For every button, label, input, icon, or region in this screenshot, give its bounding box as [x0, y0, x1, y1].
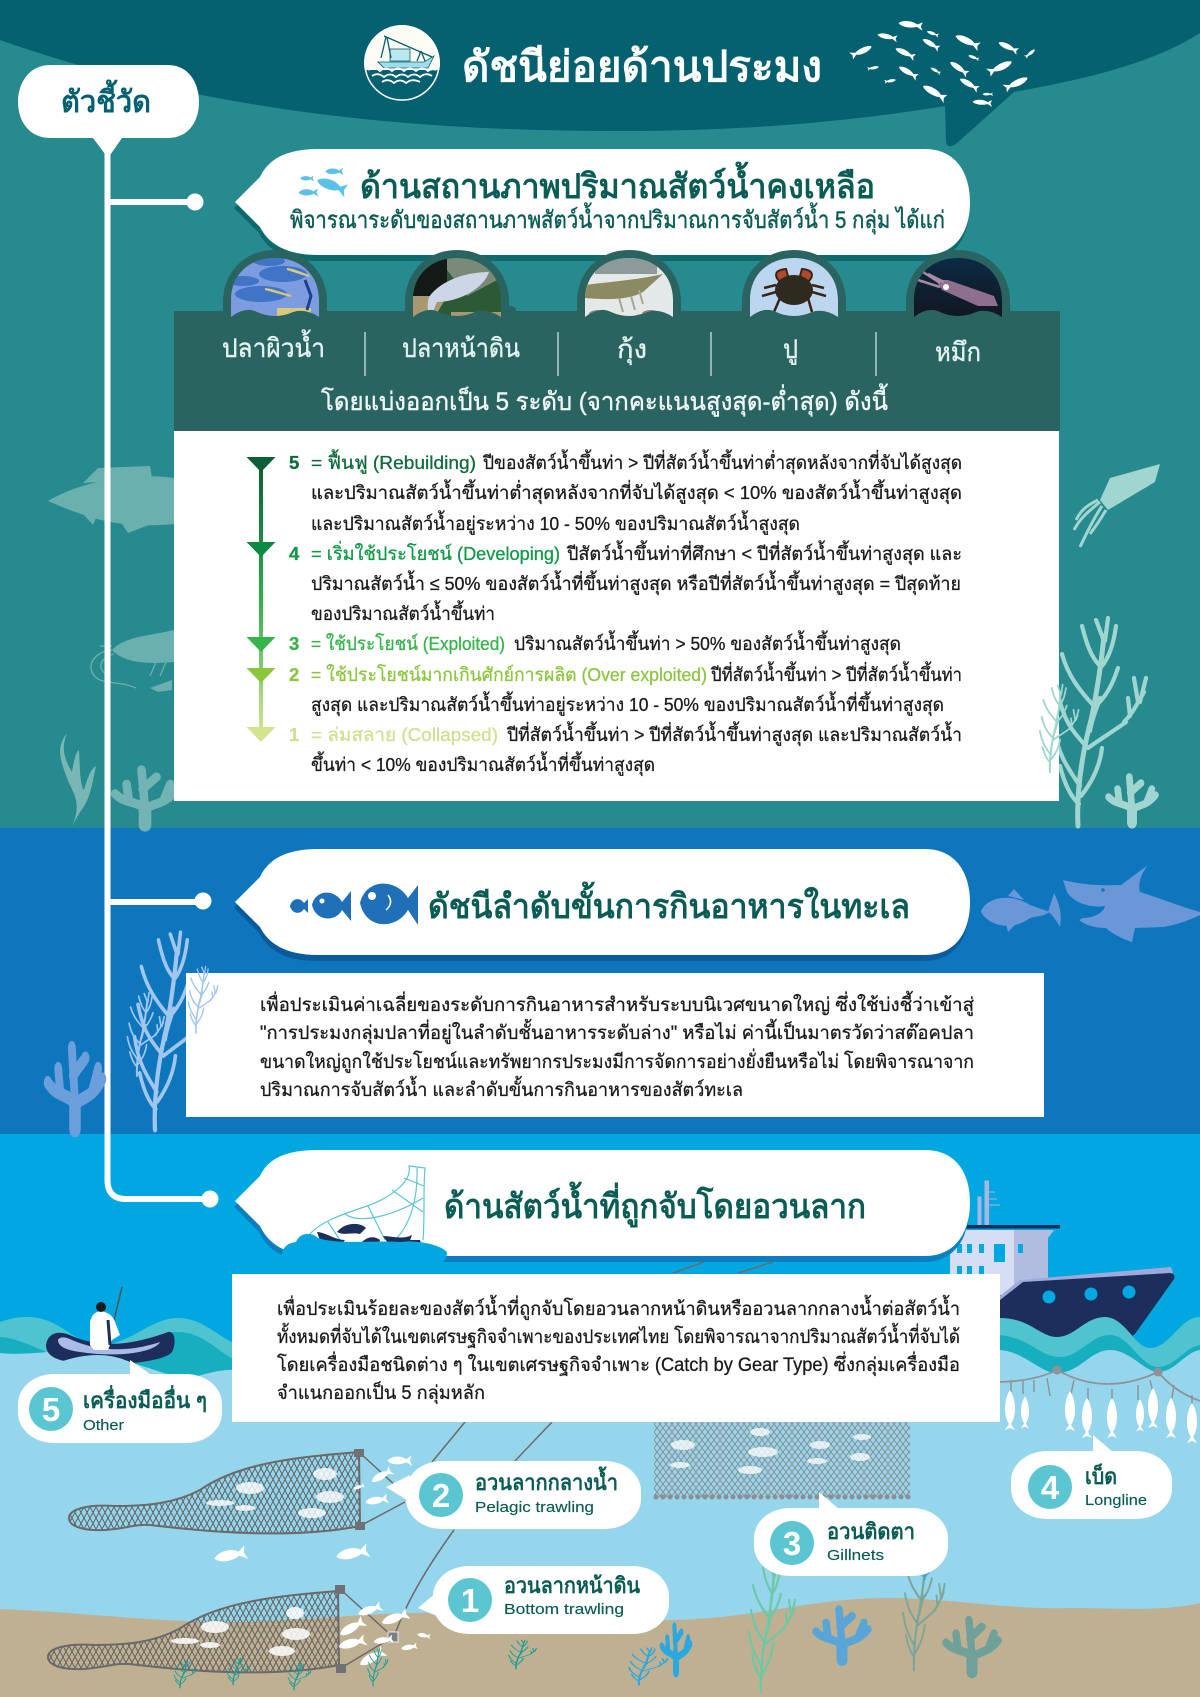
icon: fish trio: [290, 884, 418, 925]
level list: และปริมาณสัตว์น้ำอยู่ระหว่าง 10 - 50% ของปริมาณสัตว์น้ำสูงสุด: [311, 510, 800, 536]
school of fish: [849, 19, 1036, 107]
level list: = ใช้ประโยชน์ (Exploited): [311, 633, 505, 654]
callout 5: other: [18, 1360, 222, 1443]
boat with fisher: [46, 1287, 175, 1375]
decoration: seaweed over trophic panel: [188, 966, 218, 1033]
decoration: grouper fish: [48, 466, 175, 533]
level list: [289, 449, 962, 777]
level list: = ฟื้นฟู (Rebuilding): [311, 449, 476, 474]
level list: ปีสัตว์น้ำขึ้นท่าที่ศึกษา < ปีที่สัตว์น้ำขึ้นท่าสูงสุด และ: [566, 540, 962, 566]
bubble 1 heading: ด้านสถานภาพปริมาณสัตว์น้ำคงเหลือ: [360, 161, 875, 206]
panel: levels: [174, 431, 1059, 801]
callout 2: pelagic trawling: อวนลากกลางน้ำ: [475, 1466, 618, 1495]
seabed: [0, 1598, 1200, 1697]
header banner: [0, 0, 1200, 146]
label bubble: indicators: ตัวชี้วัด: [61, 79, 151, 119]
callout 3: gillnets: อวนติดตา: [827, 1519, 915, 1544]
timeline knob 2: [194, 892, 212, 910]
level list: ของปริมาณสัตว์น้ำขึ้นท่า: [311, 600, 495, 624]
net 1: bottom trawl: [48, 1585, 431, 1673]
seabed plants: [174, 1549, 998, 1692]
panel: bycatch description: โดยเครื่องมือชนิดต่าง ๆ ในเขตเศรษฐกิจจำเพาะ (Catch by Gear Type) ซึ่งกลุ่มเครื่องมือ: [277, 1351, 960, 1377]
arch: squid: [906, 250, 1010, 320]
decoration: seaweed blue large: [135, 932, 213, 1130]
decoration: shark: [1063, 865, 1200, 942]
decoration: coral blue: [48, 1048, 102, 1128]
timeline line: [108, 150, 205, 1199]
timeline knob 1: [186, 194, 204, 210]
level list: ปีที่สัตว์น้ำขึ้นท่า > ปีที่สัตว์น้ำขึ้นท่าสูงสุด และปริมาณสัตว์น้ำ: [506, 721, 962, 747]
species labels: ปลาหน้าดิน: [402, 333, 520, 363]
bubble 2 heading: ดัชนีลำดับขั้นการกินอาหารในทะเล: [428, 881, 910, 926]
bubble 2: [235, 849, 970, 955]
callout 3: gillnets: Gillnets: [827, 1547, 884, 1564]
label bubble: indicators: [18, 65, 199, 158]
decoration: tuna: [981, 889, 1061, 932]
bubble 1 subheading: พิจารณาระดับของสถานภาพสัตว์น้ำจากปริมาณการจับสัตว์น้ำ 5 กลุ่ม ได้แก่: [290, 202, 945, 235]
callout 2: pelagic trawling: [386, 1461, 641, 1529]
timeline knob 3: [202, 1190, 218, 1208]
species labels: ปู: [783, 334, 798, 365]
background: light blue sea section: [0, 1134, 1200, 1697]
level list: 4: [289, 543, 300, 564]
level list: 1: [289, 724, 299, 745]
bubble 3: [235, 1150, 970, 1262]
longline: [1000, 1366, 1200, 1443]
decoration: shrimp: [91, 630, 174, 692]
arch: shrimp: [577, 250, 681, 320]
waves: [0, 1317, 1200, 1697]
species labels: [222, 329, 981, 367]
callout 2: pelagic trawling: 2: [432, 1477, 450, 1514]
arch: crab: [742, 250, 846, 320]
bubble 1 shadow: [234, 155, 969, 261]
level list: และปริมาณสัตว์น้ำขึ้นท่าต่ำสุดหลังจากที่จับได้สูงสุด < 10% ของสัตว์น้ำขึ้นท่าสูงสุด: [311, 479, 962, 505]
decoration: coral right: [1109, 777, 1155, 823]
level list: 5: [289, 452, 299, 473]
panel: trophic description: ขนาดใหญ่ถูกใช้ประโยชน์และทรัพยากรประมงมีการจัดการอย่างยั่งยืนหรือไม่ โดยพิจารณาจาก: [260, 1048, 974, 1073]
panel: trophic description: เพื่อประเมินค่าเฉลี่ยของระดับการกินอาหารสำหรับระบบนิเวศขนาดใหญ่ ซึ่งใช้บ่งชี้ว่าเข้าสู่: [260, 991, 974, 1016]
level list: ปริมาณสัตว์น้ำ ≤ 50% ของสัตว์น้ำที่ขึ้นท่าสูงสุด หรือปีที่สัตว์น้ำขึ้นท่าสูงสุด = ปีสุดท้าย: [311, 570, 961, 596]
background: teal section: [0, 0, 1200, 828]
callout 5: other: 5: [42, 1391, 60, 1428]
level list: ขึ้นท่า < 10% ของปริมาณสัตว์น้ำที่ขึ้นท่าสูงสุด: [311, 751, 655, 777]
arches: [223, 250, 1010, 320]
callout 3: gillnets: 3: [783, 1525, 801, 1562]
decoration: coral left: [115, 770, 175, 825]
callout 4: longline: เบ็ด: [1085, 1462, 1117, 1489]
callout 1: bottom trawling: Bottom trawling: [504, 1601, 624, 1618]
species labels: ปลาผิวน้ำ: [222, 329, 325, 363]
level list: ปริมาณสัตว์น้ำขึ้นท่า > 50% ของสัตว์น้ำขึ้นท่าสูงสุด: [514, 630, 901, 656]
level list: ปีของสัตว์น้ำขึ้นท่า > ปีที่สัตว์น้ำขึ้นท่าต่ำสุดหลังจากที่จับได้สูงสุด: [482, 449, 962, 475]
ship: [950, 1181, 1174, 1345]
level list: สูงสุด และปริมาณสัตว์น้ำขึ้นท่าอยู่ระหว่าง 10 - 50% ของปริมาณสัตว์น้ำที่ขึ้นท่าสูงสุด: [311, 691, 944, 717]
ropes: [394, 1262, 773, 1637]
icon: net with whales: [282, 1166, 447, 1262]
decoration: seaweed right: [1054, 618, 1146, 826]
panel: bycatch description: เพื่อประเมินร้อยละของสัตว์น้ำที่ถูกจับโดยอวนลากหน้าดินหรืออวนลากกลางน้ำต่อสัตว์น้ำ: [277, 1295, 960, 1320]
callout 5: other: Other: [83, 1417, 124, 1434]
background: blue section: [0, 828, 1200, 1134]
panel: bycatch description: ทั้งหมดที่จับได้ในเขตเศรษฐกิจจำเพาะของประเทศไทย โดยพิจารณาจากปริมาณสัตว์น้ำที่จับได้: [277, 1323, 960, 1348]
callout 4: longline: 4: [1041, 1469, 1060, 1506]
level scale arrow: [246, 457, 276, 742]
callout 4: longline: Longline: [1085, 1492, 1147, 1509]
callout 1: bottom trawling: 1: [461, 1582, 479, 1619]
callout 5: other: เครื่องมืออื่น ๆ: [83, 1384, 207, 1413]
callout 2: pelagic trawling: Pelagic trawling: [475, 1499, 594, 1516]
arch: demersal fish: [405, 250, 516, 320]
decoration: seaweed blue small: [127, 993, 164, 1076]
level list: 3: [289, 633, 299, 654]
bubble 2 shadow: [234, 855, 969, 961]
panel: bycatch description: จำแนกออกเป็น 5 กลุ่มหลัก: [277, 1380, 485, 1405]
bubble 1: [235, 149, 970, 255]
level list: 2: [289, 664, 299, 685]
gillnet: [654, 1422, 910, 1497]
callout 1: bottom trawling: [418, 1566, 669, 1634]
net 2: pelagic trawl: [69, 1449, 412, 1566]
bubble 3 heading: ด้านสัตว์น้ำที่ถูกจับโดยอวนลาก: [444, 1181, 866, 1228]
panel: bycatch description: [232, 1274, 1000, 1422]
level list: = ล่มสลาย (Collapsed): [311, 724, 498, 745]
decoration: kelp left: [60, 733, 96, 826]
bubble 3 shadow: [234, 1156, 969, 1262]
panel subheading: โดยแบ่งออกเป็น 5 ระดับ (จากคะแนนสูงสุด-ต่ำสุด) ดังนี้: [321, 383, 888, 417]
title: ดัชนีย่อยด้านประมง: [462, 43, 822, 90]
callout 4: longline: [1011, 1435, 1172, 1519]
species labels: กุ้ง: [617, 334, 647, 365]
arch: surface fish: [223, 250, 327, 320]
icon: fishing boat badge: [364, 25, 440, 108]
panel: species header: [174, 311, 1060, 431]
level list: ปีที่สัตว์น้ำขึ้นท่า > ปีที่สัตว์น้ำขึ้นท่า: [710, 661, 962, 685]
decoration: squid: [1074, 464, 1160, 547]
decoration: seaweed over panel: [1040, 685, 1079, 772]
callout 1: bottom trawling: อวนลากหน้าดิน: [504, 1573, 640, 1598]
panel: trophic description: [186, 973, 1044, 1117]
level list: = เริ่มใช้ประโยชน์ (Developing): [311, 541, 560, 564]
species labels: หมึก: [935, 337, 981, 367]
level list: = ใช้ประโยชน์มากเกินศักย์การผลิต (Over exploited): [311, 664, 707, 685]
panel: trophic description: ปริมาณการจับสัตว์น้ำ และลำดับขั้นการกินอาหารของสัตว์ทะเล: [260, 1076, 743, 1101]
callout 3: gillnets: [754, 1492, 948, 1576]
icon: small blue fish: [299, 168, 349, 197]
panel: trophic description: "การประมงกลุ่มปลาที่อยู่ในลำดับชั้นอาหารระดับล่าง" หรือไม่ ค่านี้เป็นมาตรวัดว่าสต๊อคปลา: [260, 1019, 974, 1045]
